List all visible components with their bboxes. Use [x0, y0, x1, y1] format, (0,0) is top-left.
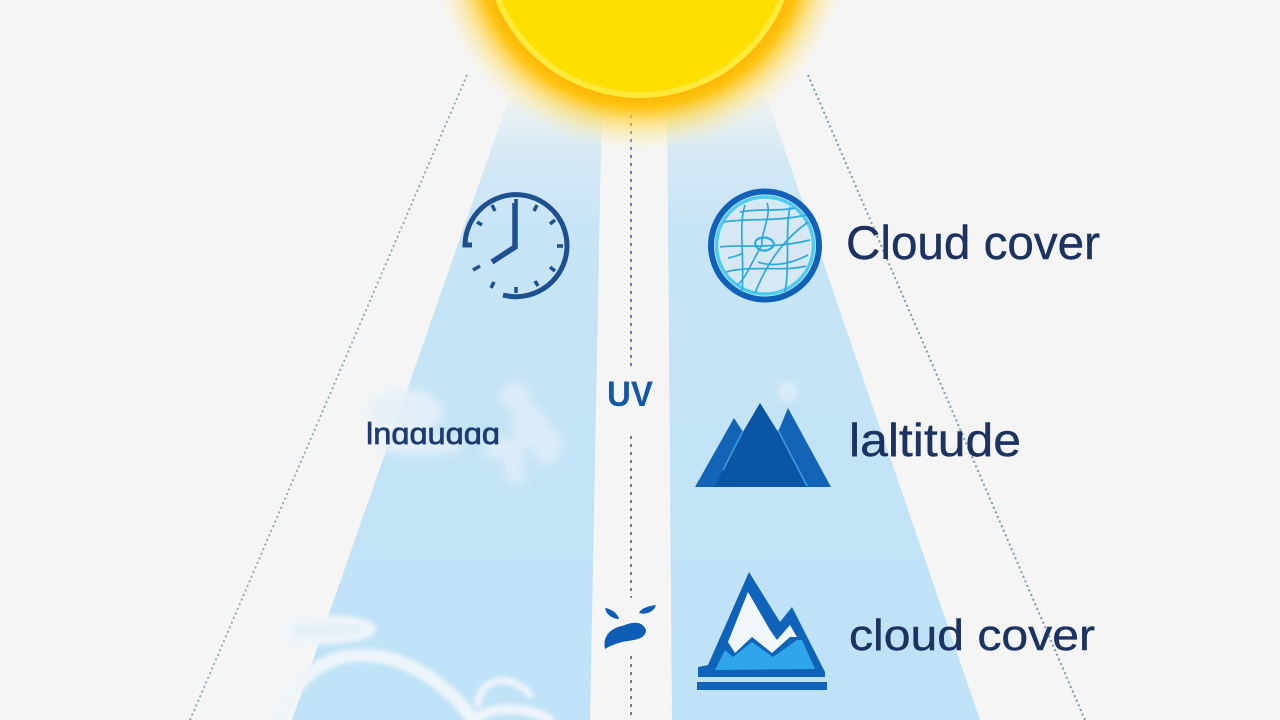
- left dotted ray: [190, 75, 467, 720]
- bottom clouds: [278, 619, 550, 720]
- sun: [430, 0, 850, 152]
- right dotted ray: [808, 75, 1085, 720]
- cloud behind middle-left label: [367, 388, 465, 455]
- sun disc: [487, 0, 793, 95]
- mist above mountain: [777, 381, 799, 403]
- icon: cloud cover globe: [710, 190, 820, 300]
- icon: clock: [465, 195, 567, 297]
- sun glow: [430, 0, 850, 152]
- label: laltitude: laltitude: [849, 414, 1021, 466]
- right light beam: [667, 95, 980, 720]
- UV label: UV: [607, 375, 654, 414]
- label: cloud cover: cloud cover: [849, 611, 1095, 660]
- clock hands: [492, 203, 515, 262]
- label: garbled left text: lnɑɑuɑɑɑ: [366, 416, 500, 451]
- icon: mountains: [695, 381, 831, 487]
- icon: snowy mountain: [697, 572, 827, 690]
- label: Cloud cover: Cloud cover: [846, 216, 1100, 269]
- left light beam: [292, 95, 602, 720]
- cloud wisps: [483, 382, 562, 485]
- icon: droplets: [604, 605, 656, 649]
- center dotted line: [630, 115, 632, 720]
